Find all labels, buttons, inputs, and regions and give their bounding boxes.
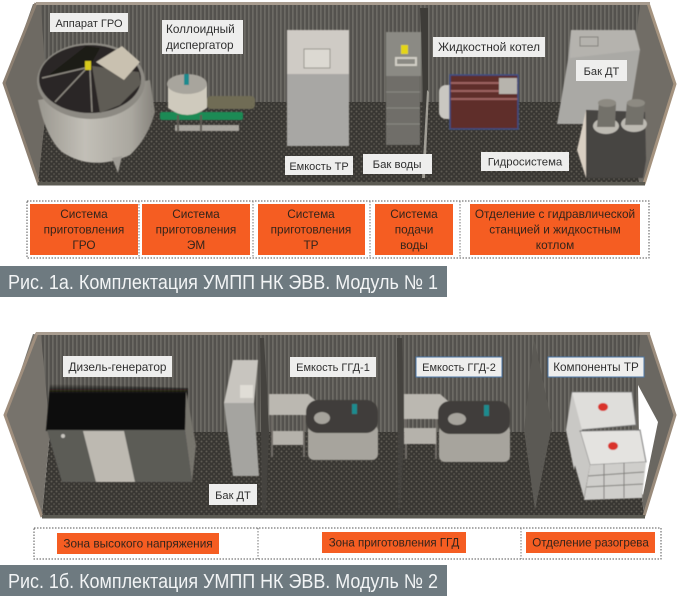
icon: liquid boiler [439,75,518,129]
icon: diesel tank [557,30,640,124]
box: hydraulic and boiler section: станцией и жидкостным [489,222,621,236]
label: liquid boiler: Жидкостной котел [438,40,540,54]
left end frame [5,333,42,517]
box: hydraulic and boiler section: Отделение с гидравлической [475,207,635,221]
box: water supply: подачи [395,222,433,236]
label: colloid disperser: Коллоидный [166,22,235,36]
partition 3 [524,338,552,510]
label: GGD-2 vessel [416,357,502,377]
label: diesel tank [576,60,627,81]
icon: TR vessel [287,30,349,146]
right end frame [644,333,675,516]
box: hydraulic and boiler section: котлом [536,238,574,252]
label: GGD-1 vessel [290,357,376,377]
box: water supply: воды [400,238,428,252]
caption: figure 1b [0,565,447,596]
dashed outline [34,528,661,559]
label: diesel tank: Бак ДТ [215,490,251,502]
label: diesel generator [63,356,172,377]
icon: diesel tank [224,360,259,476]
label: TR vessel [285,156,353,175]
bottom rail [42,515,645,518]
caption: figure 1a: Рис. 1а. Комплектация УМПП НК ЭВВ. Модуль № 1 [8,272,438,294]
label: colloid disperser: диспергатор [166,38,234,52]
left side wall [6,334,50,515]
icon: diesel generator [46,384,196,482]
panel: module 1 container [4,2,675,186]
label: water tank: Бак воды [373,159,421,171]
icon: GGD-2 vessel [404,394,510,462]
box: high voltage zone: Зона высокого напряжения [63,536,213,550]
label: TR components [548,357,644,377]
left side wall [5,4,47,183]
box: water supply [375,204,453,255]
bottom rail [38,182,645,186]
panel: module 2 zones [34,528,661,559]
box: TR preparation: Система [287,207,335,221]
caption: figure 1b: Рис. 1б. Комплектация УМПП НК ЭВВ. Модуль № 2 [8,571,438,593]
back wall [40,335,648,433]
box: EM preparation: Система [172,207,220,221]
icon: colloid disperser [160,74,255,132]
box: water supply: Система [390,207,438,221]
box: GRO preparation: ГРО [72,238,96,252]
partition 2 [397,338,404,510]
box: GRO preparation [30,204,138,255]
box: GRO preparation: приготовления [44,222,124,236]
box: heating section: Отделение разогрева [532,536,649,550]
box: TR preparation: ТР [303,238,319,252]
label: liquid boiler [433,37,545,57]
icon: water tank [386,32,421,145]
partition 1 [260,338,269,510]
label: water tank [363,154,432,174]
box: TR preparation [258,204,365,255]
label: TR vessel: Емкость ТР [289,161,349,173]
floor [38,102,640,183]
label: GGD-2 vessel: Емкость ГГД-2 [422,362,496,374]
panel: module 2 container [5,332,675,518]
back wall [40,5,640,103]
dashed outline [27,201,649,258]
box: EM preparation: приготовления [156,222,236,236]
box: EM preparation [142,204,250,255]
label: diesel tank [209,484,257,505]
icon: hydraulic unit [577,99,647,178]
label: hydraulic system: Гидросистема [488,156,563,168]
label: diesel tank: Бак ДТ [584,66,620,78]
box: EM preparation: ЭМ [187,238,205,252]
left end frame [4,3,39,185]
label: colloid disperser [162,20,243,54]
panel: module 1 systems [27,201,649,258]
floor [42,432,644,515]
icon: IBC containers [566,392,646,500]
caption: figure 1a [0,266,447,297]
label: hydraulic system [481,152,569,171]
right side wall [634,335,674,515]
box: GGD preparation zone: Зона приготовления ГГД [329,538,459,550]
top rail [36,332,650,335]
top rail [36,2,650,5]
icon: GRO tank [37,43,155,173]
right end frame [644,3,675,184]
box: heating section [526,532,655,553]
box: high voltage zone [57,533,219,554]
label: GRO apparatus: Аппарат ГРО [55,18,123,30]
box: GRO preparation: Система [60,207,108,221]
box: hydraulic and boiler section [470,204,640,255]
partition [420,8,428,180]
label: GGD-1 vessel: Емкость ГГД-1 [296,362,370,374]
label: TR components: Компоненты ТР [553,361,639,374]
icon: GGD-1 vessel [269,394,378,460]
right side wall [628,5,674,183]
label: GRO apparatus [50,13,128,32]
box: TR preparation: приготовления [271,222,351,236]
label: diesel generator: Дизель-генератор [69,360,167,374]
box: GGD preparation zone [322,532,466,553]
icon: open door [638,385,658,495]
